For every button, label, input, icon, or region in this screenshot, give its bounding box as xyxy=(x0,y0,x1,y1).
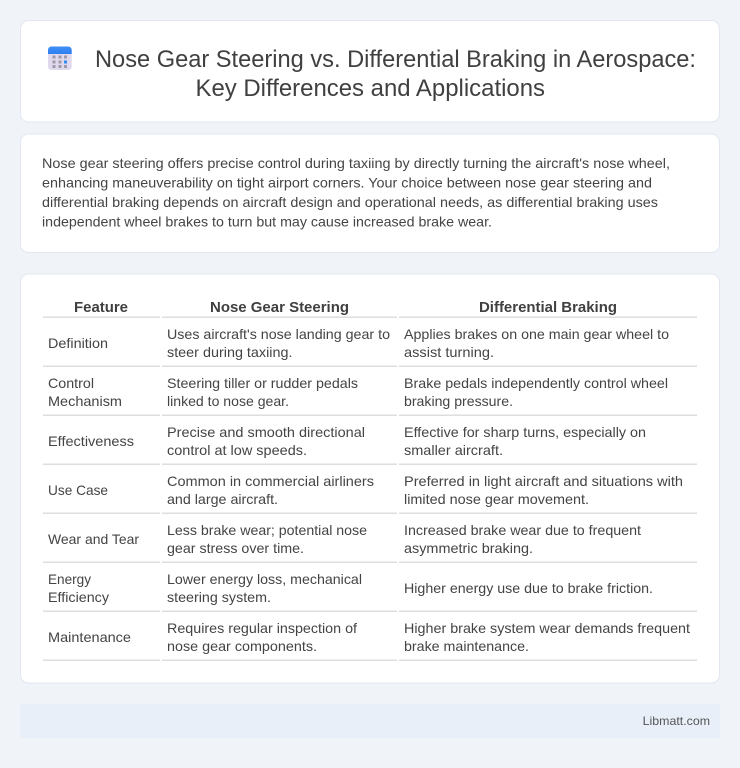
table row: wear and tear: Wear and Tear xyxy=(48,531,139,547)
table row: energy efficiency: Higher energy use due to brake friction. xyxy=(404,580,653,596)
heading: title xyxy=(95,46,696,102)
panel: intro card xyxy=(20,134,720,252)
table row: effectiveness: control at low speeds. xyxy=(167,442,307,458)
table row: control mechanism: braking pressure. xyxy=(404,393,513,409)
table row: wear and tear: Increased brake wear due to frequent xyxy=(404,522,641,538)
table row: maintenance: nose gear components. xyxy=(167,638,317,654)
heading: title: Key Differences and Applications xyxy=(196,75,545,102)
table row: control mechanism xyxy=(43,375,697,416)
footer: Libmatt.com xyxy=(643,714,710,728)
table row: maintenance: brake maintenance. xyxy=(404,638,529,654)
table row: definition xyxy=(43,326,697,367)
table row: effectiveness xyxy=(43,424,697,465)
table row: maintenance: Maintenance xyxy=(48,629,131,645)
icon: calendar grid xyxy=(48,46,72,70)
table row: definition: steer during taxiing. xyxy=(167,344,292,360)
table row: use case: Preferred in light aircraft and situations with xyxy=(404,473,683,489)
heading: title: Nose Gear Steering vs. Differential Braking in Aerospace: xyxy=(95,46,696,73)
table row: use case: limited nose gear movement. xyxy=(404,491,589,507)
table row: energy efficiency: Lower energy loss, mechanical xyxy=(167,571,362,587)
table row: control mechanism: Steering tiller or rudder pedals xyxy=(167,375,358,391)
table row: definition: assist turning. xyxy=(404,344,494,360)
table row: energy efficiency xyxy=(43,571,697,612)
text block: introduction: differential braking depends on aircraft design and operational needs, as differential braking uses xyxy=(42,194,658,210)
table row: wear and tear: asymmetric braking. xyxy=(404,540,533,556)
table row: definition: Definition xyxy=(48,335,108,351)
table row: maintenance xyxy=(43,620,697,661)
table header row: Feature xyxy=(74,299,128,316)
text block: introduction: independent wheel brakes to turn but may cause increased brake wear. xyxy=(42,214,492,230)
table header row: Differential Braking xyxy=(479,299,617,316)
text block: introduction: Nose gear steering offers precise control during taxiing by directly turning the aircraft's nose wheel, xyxy=(42,155,670,171)
table row: definition: Applies brakes on one main gear wheel to xyxy=(404,326,669,342)
panel: title card xyxy=(20,20,720,122)
table row: use case xyxy=(43,473,697,514)
table row: maintenance: Higher brake system wear demands frequent xyxy=(404,620,690,636)
table row: effectiveness: smaller aircraft. xyxy=(404,442,503,458)
table row: control mechanism: Mechanism xyxy=(48,393,122,409)
table row: use case: Common in commercial airliners xyxy=(167,473,374,489)
table row: wear and tear: gear stress over time. xyxy=(167,540,304,556)
table row: definition: Uses aircraft's nose landing gear to xyxy=(167,326,390,342)
table row: use case: and large aircraft. xyxy=(167,491,278,507)
footer xyxy=(20,704,720,738)
table header row xyxy=(43,299,697,318)
table row: energy efficiency: Efficiency xyxy=(48,589,109,605)
table row: energy efficiency: Energy xyxy=(48,571,91,587)
table row: effectiveness: Effective for sharp turns, especially on xyxy=(404,424,646,440)
table row: maintenance: Requires regular inspection of xyxy=(167,620,357,636)
table row: effectiveness: Effectiveness xyxy=(48,433,134,449)
table row: wear and tear xyxy=(43,522,697,563)
table row: control mechanism: Brake pedals independently control wheel xyxy=(404,375,668,391)
table row: control mechanism: linked to nose gear. xyxy=(167,393,289,409)
text block: introduction xyxy=(42,155,670,230)
table row: energy efficiency: steering system. xyxy=(167,589,271,605)
table row: effectiveness: Precise and smooth directional xyxy=(167,424,365,440)
panel: comparison table xyxy=(20,274,720,683)
text block: introduction: enhancing maneuverability on tight airport corners. Your choice between nose gear steering and xyxy=(42,174,652,190)
table row: control mechanism: Control xyxy=(48,375,94,391)
table row: use case: Use Case xyxy=(48,482,108,498)
table header row: Nose Gear Steering xyxy=(210,299,349,316)
table row: wear and tear: Less brake wear; potential nose xyxy=(167,522,367,538)
